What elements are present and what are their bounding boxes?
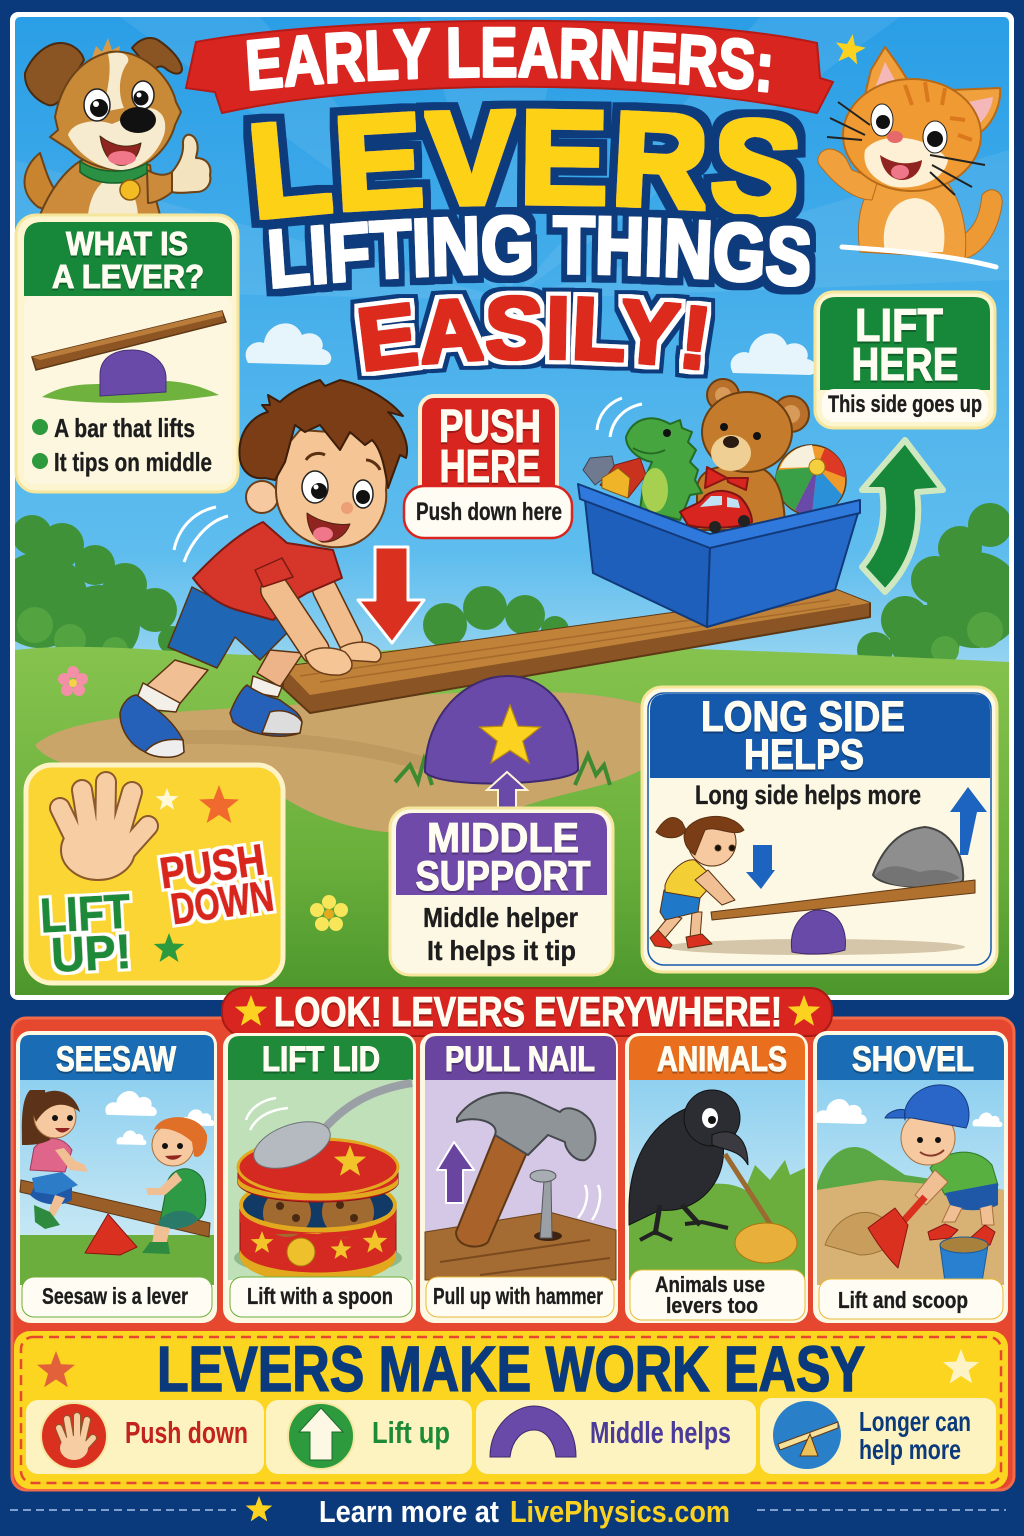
dirt path <box>35 691 650 833</box>
card: seesaw: Seesaw is a lever <box>42 1283 188 1309</box>
front arm <box>275 590 315 650</box>
card: pull nail: PULL NAIL <box>445 1040 595 1079</box>
item: lift up <box>266 1400 472 1474</box>
illustration: fulcrum with star <box>395 676 610 785</box>
panel: push here <box>404 396 572 538</box>
diagram: girl pushes lever under rock <box>650 787 987 955</box>
grass ground <box>15 647 1009 995</box>
lift up text: UP! <box>50 926 133 983</box>
bushes <box>15 503 1009 660</box>
card: shovel <box>813 1031 1008 1323</box>
title: levers: LEVERS <box>243 100 806 228</box>
push down text <box>157 835 277 935</box>
card: seesaw: SEESAW <box>56 1040 176 1079</box>
illustration: big lever plank <box>283 590 870 713</box>
card: animals: levers too <box>666 1293 758 1318</box>
toy blocks <box>583 456 646 498</box>
illustration: dog <box>25 38 210 215</box>
item: longer can help more: help more <box>859 1434 961 1465</box>
card: seesaw <box>16 1031 217 1323</box>
panel: levers make work easy <box>14 1331 1008 1489</box>
lift up text <box>39 886 134 983</box>
footer: learn more: Learn more at <box>319 1494 499 1529</box>
card: lift lid <box>223 1033 416 1323</box>
card: shovel: Lift and scoop <box>838 1287 968 1313</box>
cat ledge <box>842 247 996 267</box>
illustration: hammer pulling nail <box>425 1093 616 1280</box>
bullets <box>32 413 212 477</box>
title banner <box>186 21 833 113</box>
panel: middle support: SUPPORT <box>416 852 591 899</box>
item: longer can help more: Longer can <box>859 1406 971 1437</box>
bullets: A bar that lifts <box>54 413 195 443</box>
girl <box>650 816 744 948</box>
footer: learn more: LivePhysics.com <box>510 1494 730 1529</box>
illustration: boy with shovel <box>815 1085 1002 1282</box>
item: lift up: Lift up <box>372 1415 450 1450</box>
motion lines <box>174 507 228 562</box>
arrow: push down <box>358 547 424 643</box>
illustration: spoon lifting tin lid <box>234 1083 412 1284</box>
hair <box>239 380 407 488</box>
panel: long side helps <box>642 687 997 972</box>
heading: LEVERS MAKE WORK EASY <box>157 1333 865 1405</box>
shirt <box>193 522 342 620</box>
card: animals <box>625 1033 808 1323</box>
arrow: middle support up <box>487 772 527 808</box>
illustration: crow with stick <box>629 1090 797 1263</box>
item: middle helps: Middle helps <box>590 1415 731 1450</box>
diagram: small lever <box>32 311 226 403</box>
head <box>276 430 387 547</box>
heading: WHAT IS <box>66 225 188 262</box>
illustration: cat <box>818 47 1002 260</box>
item: push down <box>26 1400 264 1474</box>
arrow: lift up <box>862 440 943 592</box>
card: pull nail: Pull up with hammer <box>433 1283 603 1309</box>
ear <box>246 481 278 513</box>
toy teddy bear <box>697 379 809 530</box>
panel: main scene <box>0 12 1023 1000</box>
panel: push here: HERE <box>440 440 540 492</box>
panel: hand, lift up, push down <box>26 765 283 983</box>
lift up text: LIFT <box>39 886 132 943</box>
title: easily: EASILY! <box>350 286 716 380</box>
item: longer can help more <box>760 1398 996 1474</box>
back arm <box>325 590 350 640</box>
card: animals: ANIMALS <box>657 1040 787 1079</box>
card: lift lid: Lift with a spoon <box>247 1283 393 1309</box>
panel: middle support: Middle helper <box>423 902 578 933</box>
panel: levers everywhere section <box>12 1018 1014 1490</box>
illustration: kids on seesaw <box>20 1090 215 1255</box>
panel: long side helps: HELPS <box>744 731 864 779</box>
flowers <box>58 666 348 931</box>
panel: push here: PUSH <box>439 400 541 452</box>
hands <box>305 642 381 675</box>
icon: star near title <box>833 32 868 65</box>
panel: what is a lever <box>16 215 238 492</box>
bin <box>585 500 710 627</box>
panel: lift here: LIFT <box>855 299 943 351</box>
toy car <box>680 491 752 533</box>
card: shovel: SHOVEL <box>852 1040 974 1079</box>
panel: lift here <box>815 292 995 428</box>
stars <box>154 785 239 962</box>
girl <box>30 1180 72 1205</box>
panel: middle support <box>390 808 613 975</box>
illustration: boy <box>120 380 407 757</box>
panel: lift here: HERE <box>852 338 958 390</box>
toy ball <box>776 445 846 515</box>
card: animals: Animals use <box>655 1272 765 1297</box>
card: lift lid: LIFT LID <box>262 1040 380 1079</box>
heading: A LEVER? <box>52 258 204 295</box>
toy dinosaur <box>626 418 702 520</box>
item: push down: Push down <box>125 1415 248 1450</box>
clouds <box>246 323 816 375</box>
icon: hand <box>60 782 148 880</box>
panel: middle support: MIDDLE <box>427 814 579 861</box>
panel: push here: Push down here <box>416 498 562 526</box>
push down text: PUSH <box>157 835 268 898</box>
title: early learners: EARLY LEARNERS: <box>246 26 771 93</box>
boy <box>160 1169 206 1222</box>
title: lifting things: LIFTING THINGS <box>262 207 816 296</box>
card: pull nail <box>420 1033 618 1323</box>
item: middle helps <box>476 1400 756 1474</box>
footer: learn more <box>10 1494 1006 1529</box>
push down text: DOWN <box>168 871 277 934</box>
panel: long side helps: LONG SIDE <box>701 693 905 741</box>
panel: middle support: It helps it tip <box>427 935 576 966</box>
banner: look levers everywhere: LOOK! LEVERS EVERYWHERE! <box>274 988 782 1035</box>
panel: long side helps: Long side helps more <box>695 780 921 810</box>
illustration: toy bin with toys <box>578 379 860 627</box>
heading <box>52 225 204 295</box>
bullets: It tips on middle <box>54 447 212 477</box>
legs and shoes <box>120 587 303 757</box>
